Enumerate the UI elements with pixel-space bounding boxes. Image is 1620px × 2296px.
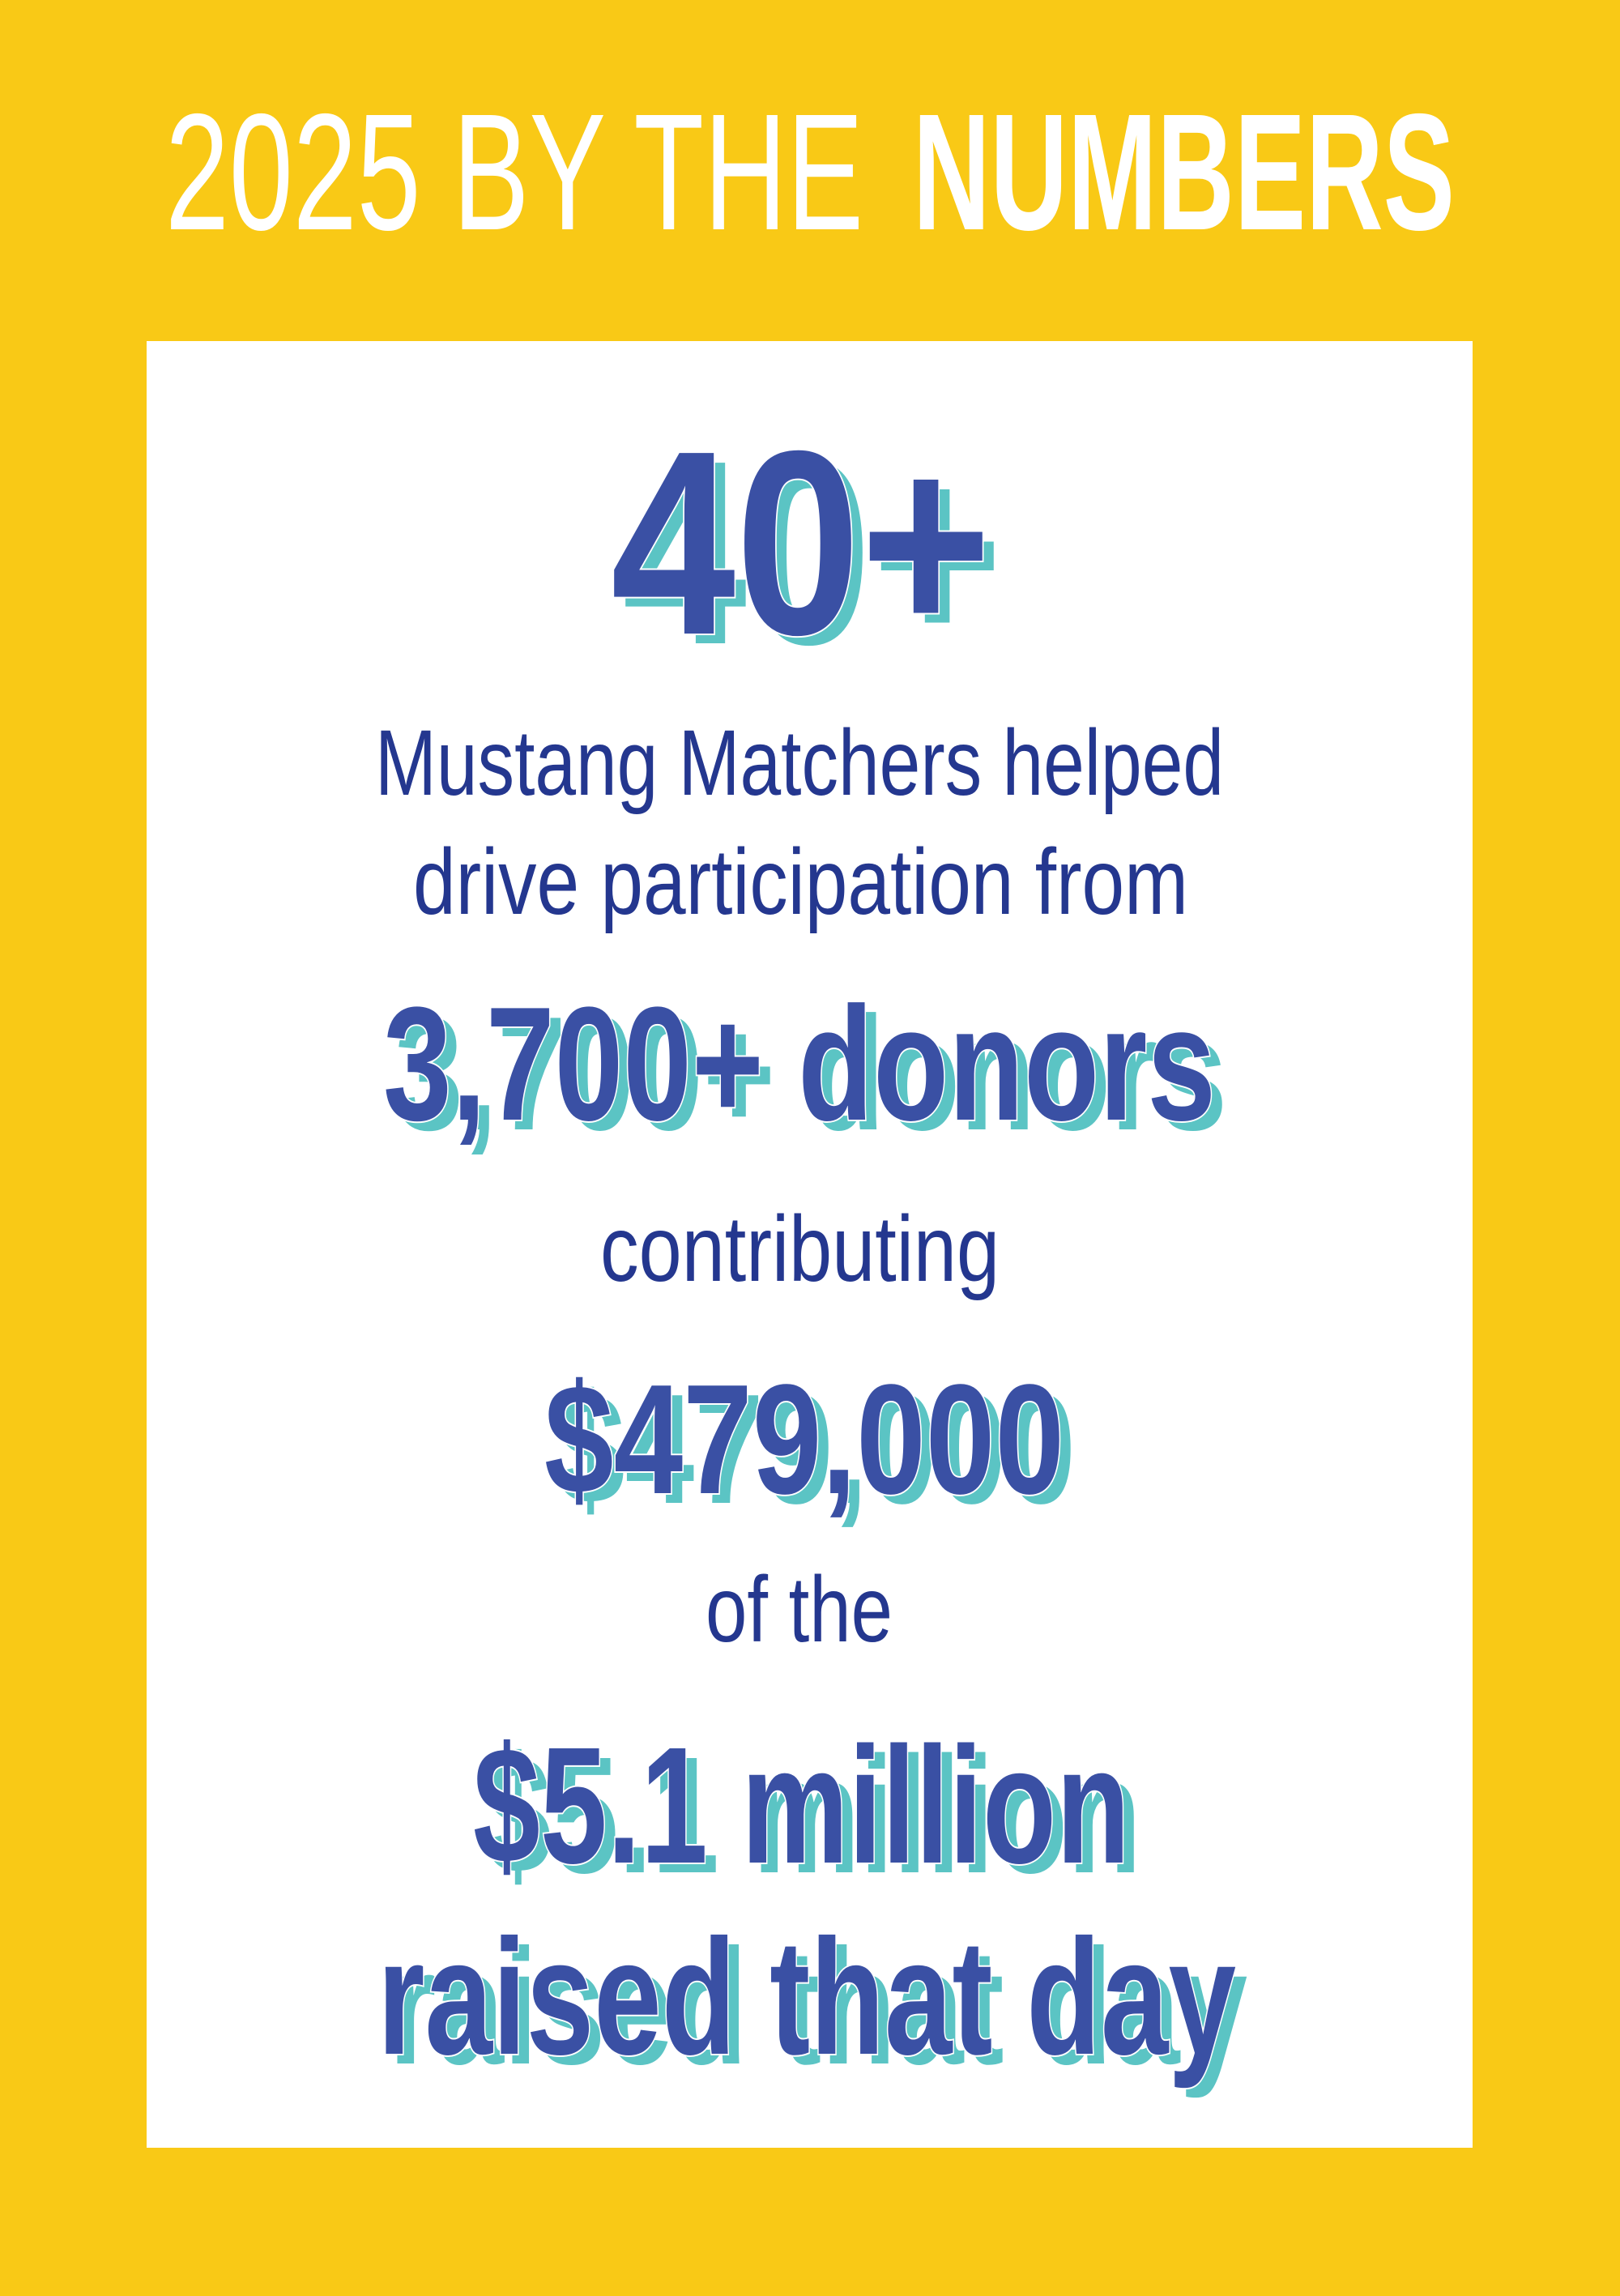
- panel: white stats card: [147, 341, 1473, 2148]
- text: of the: of the: [706, 1558, 893, 1662]
- title: 2025 BY THE: [165, 79, 863, 265]
- text: contributing: contributing: [600, 1197, 1000, 1301]
- big number: 40+: 40+: [622, 406, 1003, 699]
- big text: raised that day: raised that day: [389, 1915, 1247, 2099]
- big number: $479,000: $479,000: [556, 1361, 1076, 1536]
- big number: $479,000: $479,000: [544, 1351, 1064, 1526]
- big text: raised that day: raised that day: [377, 1906, 1236, 2089]
- text: Mustang Matchers helped drive participation from: Mustang Matchers helped: [375, 711, 1224, 815]
- text: Mustang Matchers helped drive participation from: [375, 711, 1224, 934]
- big number: 3,700+ donors: 3,700+ donors: [383, 974, 1216, 1154]
- big number: 3,700+ donors: 3,700+ donors: [394, 984, 1227, 1164]
- text: Mustang Matchers helped drive participation from: drive participation from: [413, 830, 1188, 934]
- big number: $5.1 million: $5.1 million: [484, 1722, 1141, 1908]
- big number: 40+: 40+: [611, 396, 991, 689]
- big number: $5.1 million: $5.1 million: [473, 1713, 1130, 1898]
